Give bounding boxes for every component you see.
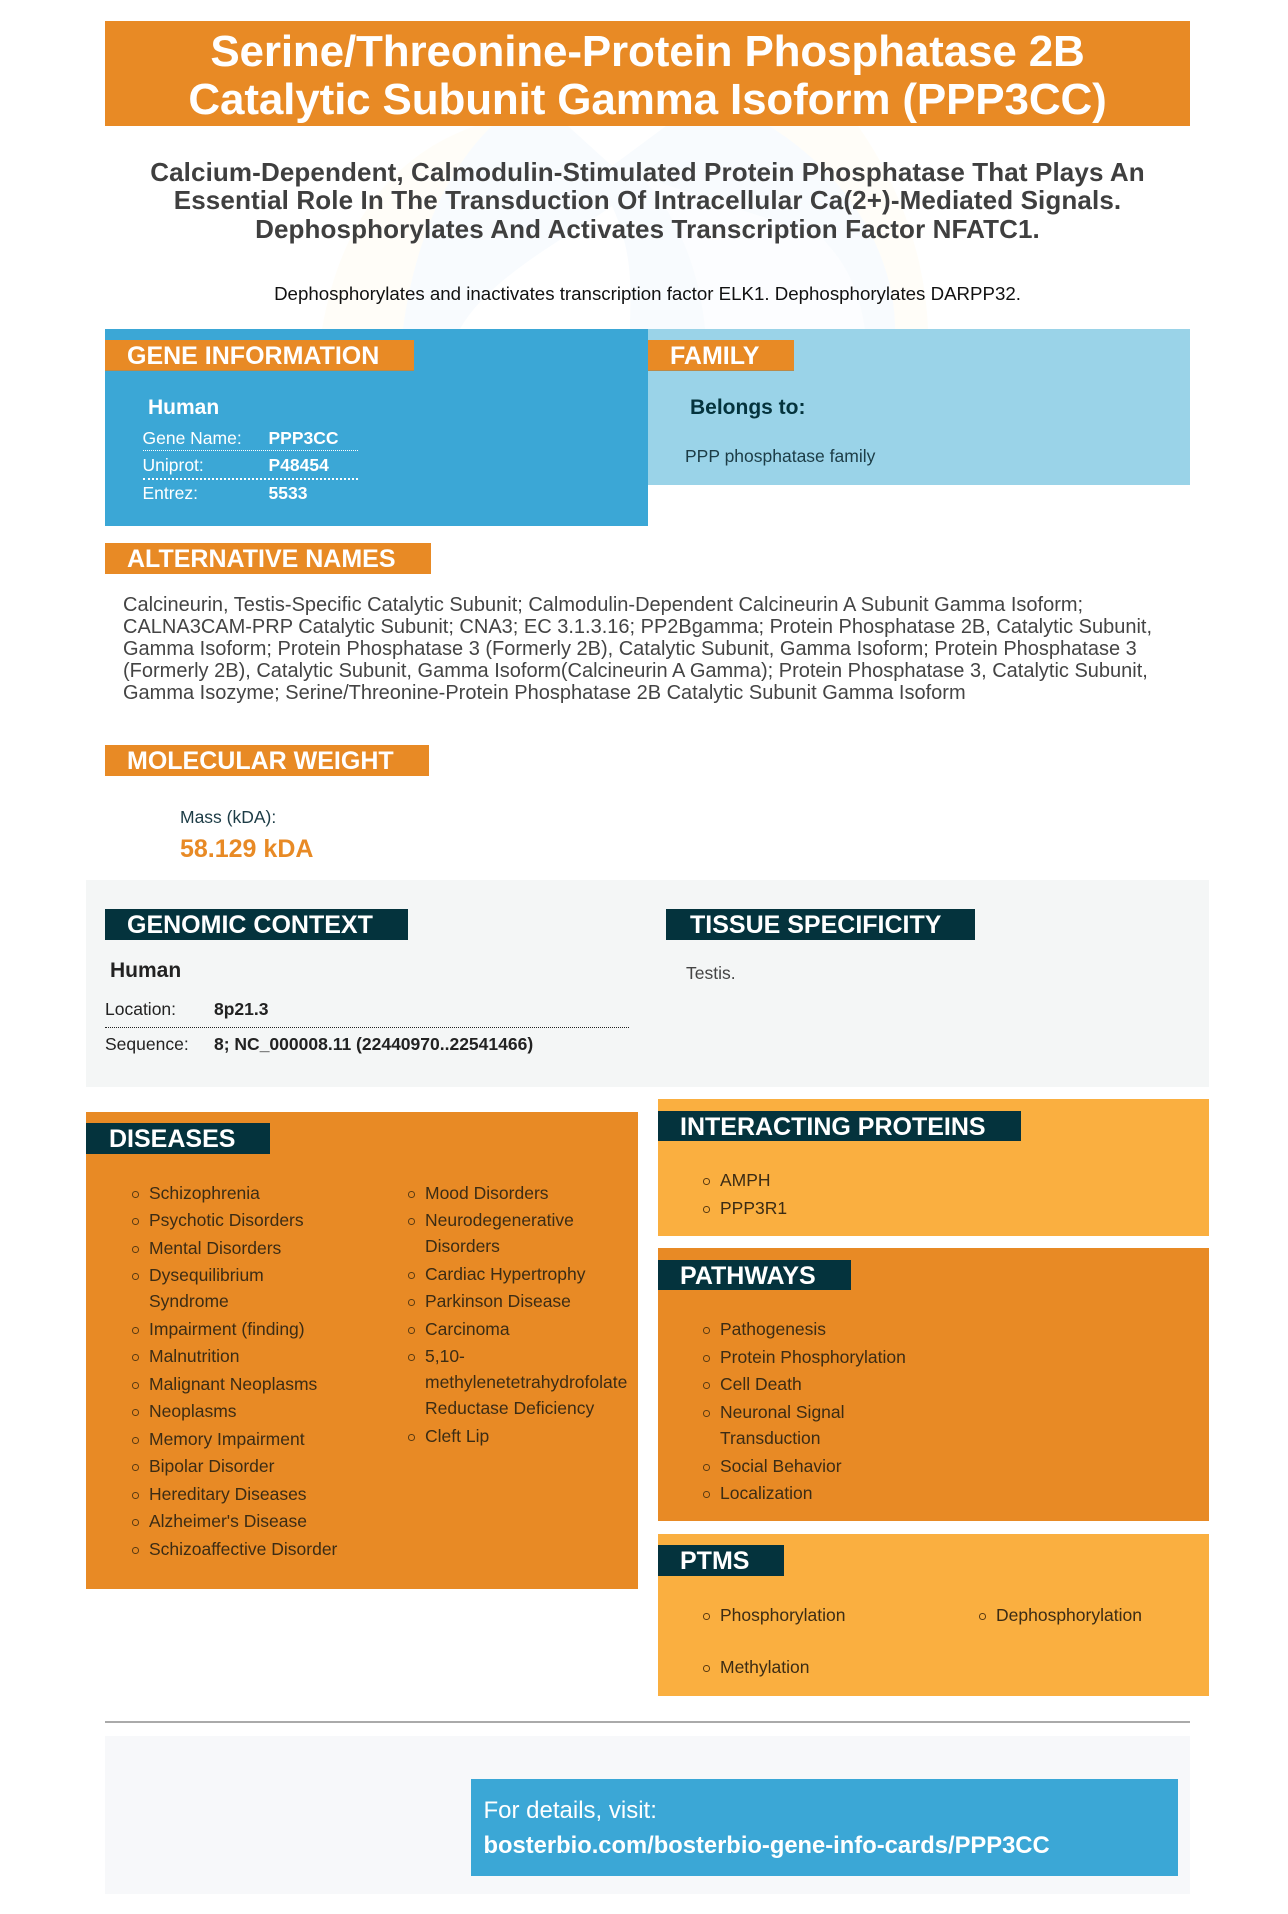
PTM list: Methylation [720, 1657, 810, 1677]
disease list column 1: Schizoaffective Disorder [149, 1539, 337, 1559]
pathways list: Pathogenesis [720, 1319, 826, 1339]
disease list column 2 [408, 1183, 627, 1446]
disease list column 1: Mental Disorders [149, 1238, 281, 1258]
heading: PTMs: PTMS [680, 1547, 749, 1575]
heading: tissue specificity: TISSUE SPECIFICITY [690, 911, 941, 939]
subtitle: Calcium-Dependent, Calmodulin-Stimulated Protein Phosphatase That Plays An [150, 157, 1145, 187]
disease list column 2: Carcinoma [425, 1319, 510, 1339]
species label: Human [148, 396, 219, 419]
title banner [105, 21, 1190, 126]
genomic rows: 8p21.3 [214, 999, 268, 1019]
disease list column 1: Memory Impairment [149, 1429, 305, 1449]
disease list column 1: Psychotic Disorders [149, 1210, 304, 1230]
disease list column 1: Dysequilibrium [149, 1265, 264, 1285]
interacting proteins list: AMPH [720, 1170, 771, 1190]
heading: genomic context: GENOMIC CONTEXT [127, 911, 373, 939]
tissue text: Testis. [686, 963, 736, 983]
panel: diseases [86, 1112, 638, 1589]
gene info rows: P48454 [268, 455, 329, 475]
alternative names text: Gamma Isoform; Protein Phosphatase 3 (Formerly 2B), Catalytic Subunit, Gamma Isoform; Protein Phosphatase 3 [123, 638, 1137, 660]
title banner: Serine/Threonine-Protein Phosphatase 2B [210, 27, 1085, 76]
pathways list: Protein Phosphorylation [720, 1347, 906, 1367]
alternative names text: Gamma Isozyme; Serine/Threonine-Protein Phosphatase 2B Catalytic Subunit Gamma Isoform [123, 682, 966, 704]
subtitle: Essential Role In The Transduction Of Intracellular Ca(2+)-Mediated Signals. [174, 185, 1121, 215]
gene info rows: Uniprot: [142, 455, 204, 475]
genomic rows: Location: [105, 999, 176, 1019]
alternative names text: CALNA3CAM-PRP Catalytic Subunit; CNA3; EC 3.1.3.16; PP2Bgamma; Protein Phosphatase 2B, Catalytic Subunit, [123, 616, 1152, 638]
gene info rows [142, 428, 358, 503]
gene info rows: 5533 [268, 483, 307, 503]
panel: interacting proteins [658, 1099, 1209, 1236]
disease list column 2: Parkinson Disease [425, 1291, 571, 1311]
alternative names text: Calcineurin, Testis-Specific Catalytic Subunit; Calmodulin-Dependent Calcineurin A Subunit Gamma Isoform; [123, 594, 1083, 616]
interacting proteins list: PPP3R1 [720, 1198, 787, 1218]
disease list column 2: Mood Disorders [425, 1183, 549, 1203]
panel: footer [105, 1736, 1190, 1894]
disease list column 1: Schizophrenia [149, 1183, 260, 1203]
disease list column 2: Cleft Lip [425, 1426, 489, 1446]
PTM list: Dephosphorylation [996, 1605, 1142, 1625]
disease list column 1: Malnutrition [149, 1346, 239, 1366]
genomic rows [105, 999, 629, 1054]
heading: pathways: PATHWAYS [680, 1262, 816, 1290]
disease list column 2: Neurodegenerative [425, 1210, 574, 1230]
alternative names text: (Formerly 2B), Catalytic Subunit, Gamma Isoform(Calcineurin A Gamma); Protein Phosphatase 3, Catalytic Subunit, [123, 660, 1148, 682]
callout: details link [471, 1779, 1178, 1876]
panel: genomic context and tissue specificity [86, 880, 1209, 1087]
gene info rows: Entrez: [142, 483, 198, 503]
heading: alternative names: ALTERNATIVE NAMES [127, 545, 396, 573]
pathways list: Social Behavior [720, 1456, 842, 1476]
disease list column 1: Malignant Neoplasms [149, 1374, 317, 1394]
panel: family [648, 329, 1190, 485]
genomic rows: 8; NC_000008.11 (22440970..22541466) [214, 1034, 533, 1054]
disease list column 1: Neoplasms [149, 1401, 237, 1421]
background watermark logo [300, 126, 1000, 329]
PTM list [703, 1605, 1142, 1677]
disease list column 2: Reductase Deficiency [425, 1398, 594, 1418]
mass label: Mass (kDA): [180, 807, 276, 827]
belongs to label: Belongs to: [690, 396, 806, 419]
heading: diseases [86, 1123, 270, 1154]
disease list column 2: Disorders [425, 1236, 500, 1256]
heading: PTMs [658, 1545, 784, 1576]
heading: gene information: GENE INFORMATION [127, 342, 379, 370]
pathways list [703, 1319, 906, 1503]
alternative names text [123, 594, 1152, 704]
disease list column 2: 5,10- [425, 1346, 465, 1366]
disease list column 1: Bipolar Disorder [149, 1456, 274, 1476]
gene info rows: PPP3CC [268, 428, 339, 448]
heading: molecular weight: MOLECULAR WEIGHT [127, 747, 394, 775]
disease list column 1 [132, 1183, 338, 1559]
heading: pathways [658, 1260, 851, 1290]
heading: diseases: DISEASES [109, 1125, 235, 1153]
disease list column 1: Syndrome [149, 1291, 229, 1311]
subtitle [150, 157, 1145, 244]
panel: pathways [658, 1248, 1209, 1521]
disease list column 1: Alzheimer's Disease [149, 1511, 307, 1531]
PTM list: Phosphorylation [720, 1605, 846, 1625]
gene info rows: Gene Name: [142, 428, 242, 448]
subtitle: Dephosphorylates And Activates Transcription Factor NFATC1. [255, 214, 1040, 244]
callout label: For details, visit: [484, 1797, 657, 1824]
disease list column 1: Hereditary Diseases [149, 1484, 307, 1504]
panel: PTMs [658, 1534, 1209, 1696]
disease list column 1: Impairment (finding) [149, 1319, 305, 1339]
interacting proteins list [703, 1170, 787, 1218]
heading: family: FAMILY [670, 342, 759, 370]
pathways list: Localization [720, 1483, 812, 1503]
genomic rows: Sequence: [105, 1034, 189, 1054]
heading: interacting proteins: INTERACTING PROTEINS [680, 1113, 986, 1141]
family value: PPP phosphatase family [685, 446, 875, 466]
description: Dephosphorylates and inactivates transcription factor ELK1. Dephosphorylates DARPP32. [274, 283, 1021, 304]
disease list column 2: Cardiac Hypertrophy [425, 1264, 585, 1284]
disease list column 2: methylenetetrahydrofolate [425, 1372, 627, 1392]
callout url: bosterbio.com/bosterbio-gene-info-cards/PPP3CC [484, 1832, 1050, 1859]
pathways list: Neuronal Signal [720, 1402, 845, 1422]
species label: Human [110, 959, 181, 982]
mass value: 58.129 kDA [180, 835, 313, 863]
title banner: Catalytic Subunit Gamma Isoform (PPP3CC) [188, 75, 1107, 124]
pathways list: Transduction [720, 1428, 821, 1448]
panel: gene information [105, 329, 648, 526]
heading: family [648, 340, 794, 371]
pathways list: Cell Death [720, 1374, 802, 1394]
